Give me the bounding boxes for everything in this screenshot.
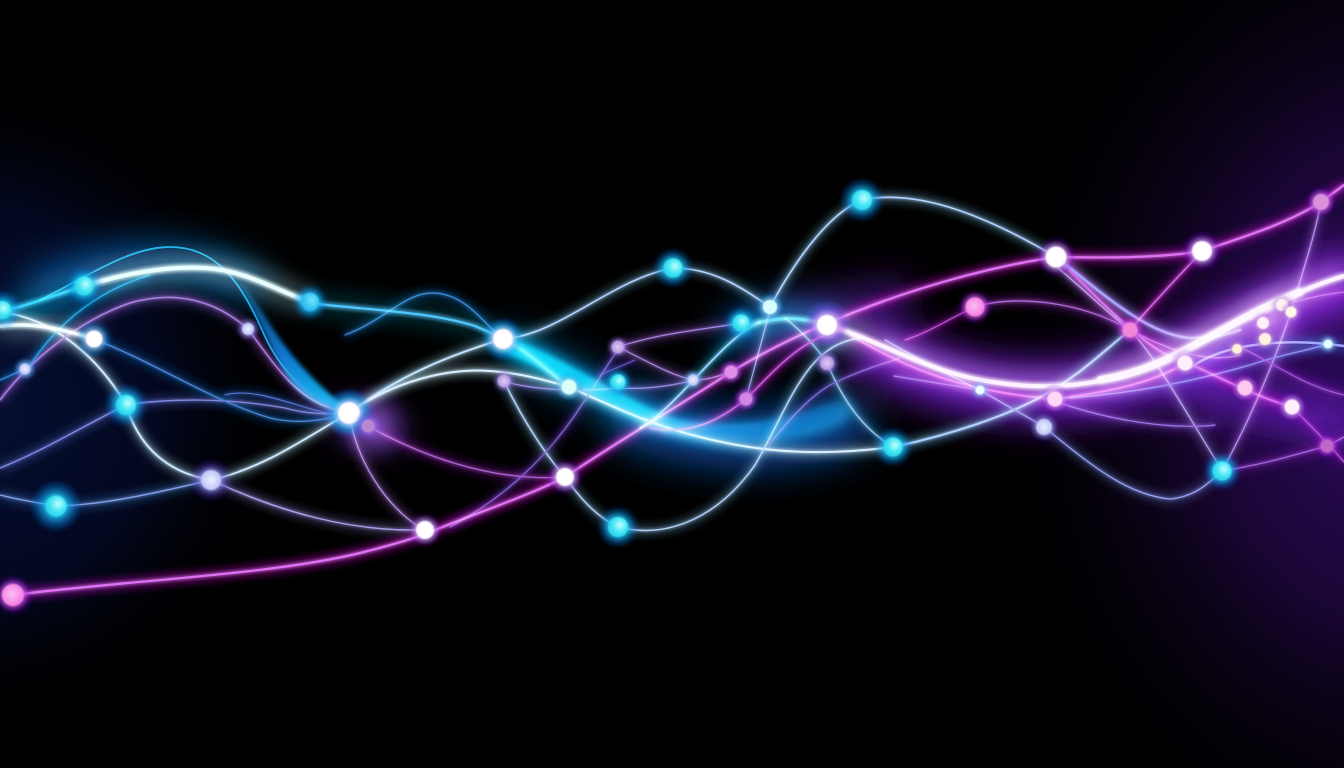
node [65,267,103,305]
strand: left of pink node [905,307,975,340]
node [292,284,328,320]
node [1171,349,1199,377]
strand: deep wave from lilac node [504,338,860,530]
node [1277,392,1307,422]
node [493,370,515,392]
node [14,358,36,380]
node [734,387,758,411]
node [555,373,583,401]
node [1306,187,1336,217]
bright main wave right: white with violet glow [827,276,1344,386]
magenta strand: main line from bottom left to upper right [13,185,1344,595]
bloom: left hub [323,387,375,439]
node [1252,312,1274,334]
node [1254,328,1276,350]
node [76,321,112,357]
wave core: widened bright section [1100,292,1300,380]
node [653,248,693,288]
node [1029,412,1059,442]
ambient glow behind the strands [40,261,1344,439]
nodes [0,178,1339,615]
strand: right pale blue [1055,344,1328,399]
strand: upper cyan wave [503,197,1056,339]
node [604,368,632,396]
node [1203,452,1241,490]
node [1228,340,1246,358]
node [189,458,233,502]
node [958,290,992,324]
node [1280,301,1302,323]
strand: hub to right pair [349,339,503,413]
node [971,381,989,399]
node [814,350,840,376]
node [1182,231,1222,271]
node [547,459,583,495]
strand: thin arc above hub [345,293,503,339]
node [756,293,784,321]
strand: lower left arc through cyan nodes [0,312,349,480]
hub blooms [323,282,1310,467]
node [0,575,33,615]
ribbon: left blue sweep into hub [232,272,352,412]
thin strands: blue and lilac network [0,197,1344,530]
strand: right blue wave [893,330,1130,447]
strand: violet arc [0,297,349,413]
strand: left blue shoulder [30,275,150,365]
node [1271,294,1293,316]
node: bright centre [805,303,849,347]
node [840,178,884,222]
ribbon: blue line through middle right [1180,343,1344,372]
node [236,317,260,341]
strand: right vertical [1222,202,1321,471]
node [30,480,82,532]
bright main wave left: cyan white [0,268,827,387]
strand: cyan rising to main wave [640,322,760,428]
node [1319,335,1337,353]
node [683,370,703,390]
node [408,513,442,547]
node [1231,374,1259,402]
node [1116,316,1144,344]
strand: node to hub [94,339,349,421]
bloom: right wave [1230,282,1310,362]
node [719,360,743,384]
node [1036,237,1076,277]
node [724,306,758,340]
node [483,319,523,359]
blue ribbons [40,247,1344,435]
node [352,410,384,442]
strand: far right lower wave [885,340,1222,499]
node [597,506,639,548]
node [1315,434,1339,458]
bloom: middle hub [481,317,525,361]
ribbon: central cyan band [515,348,840,435]
bloom: centre hub [801,299,853,351]
node [873,427,913,467]
strand: lower far left [0,480,211,506]
node [0,290,22,330]
node [1040,384,1070,414]
strand: node to hub lilac [211,480,425,530]
node: bright hub [325,389,373,437]
bloom: left hub violet [330,383,414,467]
node [104,383,148,427]
strand: middle connectors [618,323,741,347]
magenta strand: second right line [850,335,1185,399]
node [607,336,629,358]
